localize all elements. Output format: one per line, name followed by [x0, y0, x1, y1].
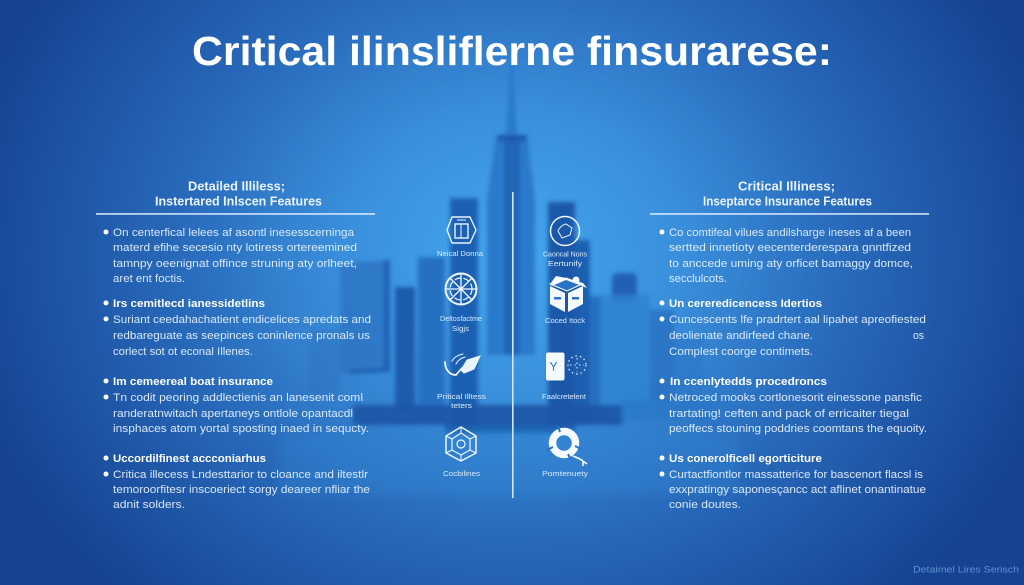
right block 3: Netroced mooks cortlonesorit einessone pansfic — [669, 392, 922, 404]
right block 1: sertted innetioty eecenterderespara gnntfized — [669, 242, 911, 254]
title: Critical ilinsliflerne finsurarese: — [192, 28, 832, 74]
panel: left features — [96, 180, 375, 511]
left block 3: randeratnwitach apertaneys ontlole opantacdl — [113, 408, 353, 420]
left block 4: Uccordilfinest accconiarhus — [113, 453, 266, 465]
footer watermark: Detaimel Lires Serisch — [913, 564, 1019, 574]
label: right icon 3: Faalcretelent — [542, 392, 587, 401]
right block 1 — [660, 227, 913, 285]
label: right icon 2: Coced Itock — [545, 316, 585, 325]
label: left icon 2: Sigjs — [452, 324, 469, 333]
right block 3: peoffecs stouning poddries coomtans the equoity. — [669, 423, 927, 435]
right block 4: exxpratingy saponesçancc act aflinet onantinatue — [669, 484, 926, 496]
icon: phone card with dotted circle: Y — [550, 360, 558, 374]
right panel heading: Inseptarce Insurance Features — [703, 194, 872, 208]
left block 3: Tn codit peoring addlectienis an lanesenit coml — [113, 392, 363, 404]
right block 4 — [660, 453, 926, 511]
left block 2: Irs cemitlecd ianessidetlins — [113, 298, 265, 310]
right block 1: Co comtifeal vilues andilsharge ineses af a been — [669, 227, 911, 239]
left panel heading — [155, 180, 322, 208]
left panel heading: Instertared Inlscen Features — [155, 194, 322, 208]
soft base of the skyline — [280, 434, 740, 494]
left block 3: Im cemeereal boat insurance — [113, 376, 273, 388]
right block 4: Curtactfiontlor massatterice for bascenort flacsl is — [669, 469, 923, 481]
label: left icon 3: Pritical Illtess — [437, 392, 486, 401]
right block 4: Us conerolficell egorticiture — [669, 453, 822, 465]
right block 2: Cuncescents lfe pradrtert aal lipahet apreofiested — [669, 314, 926, 326]
left block 4: temoroorfitesr inscoeriect sorgy deareer nfliar the — [113, 484, 370, 496]
icon: wheel — [446, 274, 476, 304]
label: right icon 4: Pomtenuety — [542, 469, 588, 478]
left block 2: redbareguate as seepinces coninlence pronals us — [113, 330, 370, 342]
right block 1: secclulcots. — [669, 273, 727, 285]
left block 3: insphaces atom yortal sposting inaed in sequcty. — [113, 423, 369, 435]
icon: rocket — [445, 354, 480, 375]
left block 4 — [104, 453, 370, 511]
label: left icon 2 — [440, 314, 482, 333]
left block 2 — [104, 298, 371, 358]
right block 2: Un cereredicencess Idertios — [669, 298, 822, 310]
label: right icon 1 — [543, 250, 587, 268]
left panel heading: Detailed Illiless; — [188, 180, 285, 194]
right block 2: os — [913, 330, 924, 342]
right block 4: conie doutes. — [669, 499, 741, 511]
icon: piggy circle — [550, 216, 580, 246]
label: left icon 3 — [437, 392, 486, 410]
icon: lifebuoy — [547, 426, 587, 466]
icon: hexagon document — [447, 217, 476, 243]
left block 4: Critica illecess Lndesttarior to cloance and iltestlr — [113, 469, 368, 481]
right block 3: In ccenlytedds procedroncs — [670, 376, 827, 388]
left block 1: aret ent foctis. — [113, 273, 185, 285]
right panel heading — [703, 180, 872, 208]
label: left icon 4: Cocbilines — [443, 469, 480, 478]
icon: phone card with dotted circle — [546, 352, 586, 380]
left block 4: adnit solders. — [113, 499, 185, 511]
right block 2: deolienate andirfeed chane. — [669, 330, 813, 342]
label: left icon 3: teters — [451, 401, 472, 410]
right block 2 — [660, 298, 926, 358]
left block 1: On centerfical lelees af asontl inesesscerninga — [113, 227, 355, 239]
left block 2: Suriant ceedahachatient endicelices apredats and — [113, 314, 371, 326]
right block 3: trartating! ceften and pack of erricaiter tiegal — [669, 408, 909, 420]
left block 2: corlect sot ot econal Illenes. — [113, 346, 253, 358]
right heading rule — [650, 213, 929, 215]
right panel heading: Critical Illiness; — [738, 180, 835, 194]
label: right icon 1: Caoncal Nons — [543, 250, 587, 258]
right block 1: to anccede uming aty orficet bamaggy domce, — [669, 258, 913, 270]
left heading rule — [96, 213, 375, 215]
left block 1 — [104, 227, 357, 285]
center divider line — [512, 192, 514, 498]
left block 1: tamnpy oeenignat offince struning aty orlheet, — [113, 258, 357, 270]
blurred city skyline — [310, 66, 710, 433]
label: right icon 1: Eertunify — [548, 259, 582, 268]
left block 3 — [104, 376, 369, 435]
right block 3 — [660, 376, 927, 435]
left block 1: materd efihe secesio nty lotiress ortereemined — [113, 242, 357, 254]
icon: open box — [550, 276, 587, 312]
icon: gem hexagon — [446, 427, 476, 461]
right block 2: Complest coorge contimets. — [669, 346, 813, 358]
panel: right features — [650, 180, 929, 511]
label: left icon 2: Deltosfactme — [440, 314, 482, 323]
label: left icon 1: Neical Donna — [437, 249, 484, 258]
